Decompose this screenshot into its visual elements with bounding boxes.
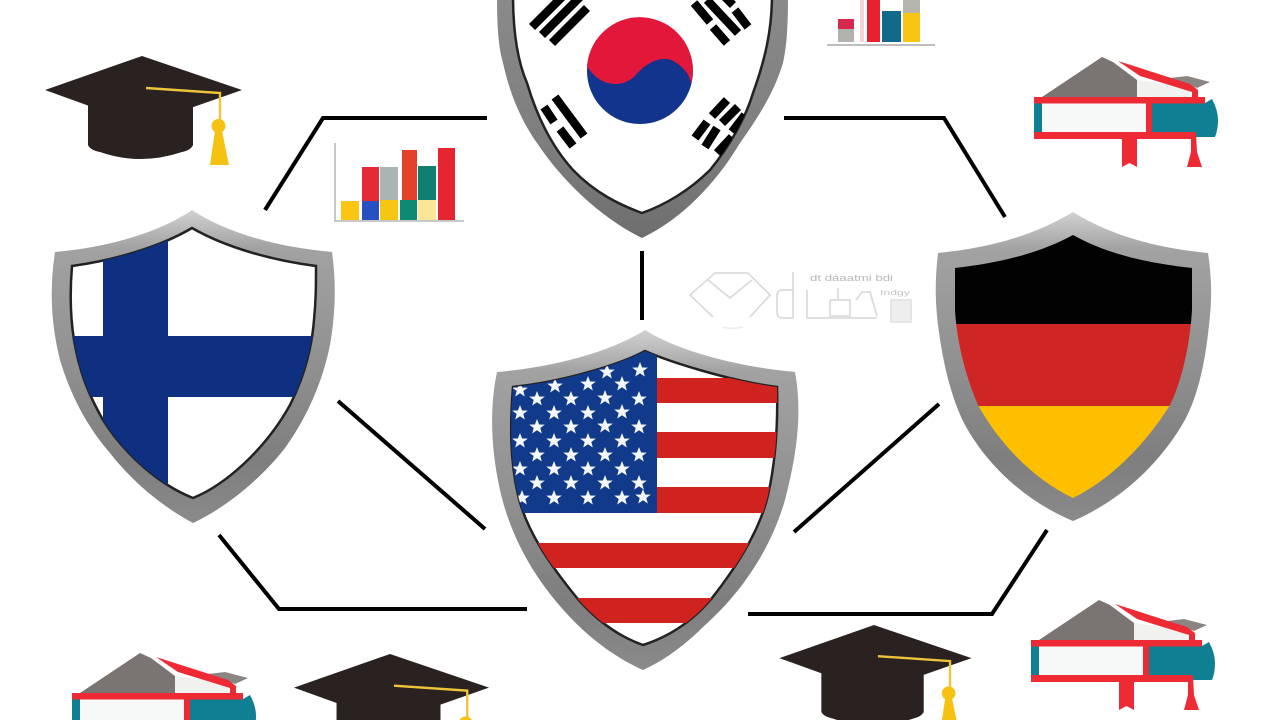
connector lines bbox=[219, 118, 1047, 614]
logo watermark bbox=[690, 272, 911, 328]
flag: Finland cross bbox=[73, 240, 312, 485]
taegeuk circle bbox=[587, 17, 693, 124]
icon: book and cap bottom right bbox=[1031, 600, 1215, 710]
icon: book and cap top right bbox=[1034, 57, 1218, 167]
connector: Finland to USA bbox=[338, 401, 485, 529]
icon: graduation cap top left bbox=[45, 56, 242, 165]
icon: graduation cap bottom centre-left bbox=[294, 654, 489, 720]
connector: Finland to USA lower bbox=[219, 535, 527, 609]
blue canton bbox=[505, 345, 657, 513]
connector: Germany to USA lower bbox=[748, 530, 1047, 614]
bar chart: top bbox=[827, 0, 935, 45]
flag: South Korea bbox=[532, 0, 748, 153]
connector: Finland to Korea bbox=[265, 118, 487, 210]
shield: South Korea bbox=[497, 0, 788, 238]
watermark small text: Indgy bbox=[880, 290, 911, 297]
flag: Germany stripes bbox=[955, 235, 1192, 498]
bar chart: left bbox=[335, 143, 464, 221]
icon: book and cap bottom left bbox=[72, 653, 256, 720]
trigrams bbox=[532, 0, 748, 153]
connector: Germany to USA bbox=[794, 404, 939, 532]
shield: USA bbox=[492, 330, 798, 670]
connector: Korea to USA bbox=[640, 251, 644, 320]
icon: graduation cap bottom centre-right bbox=[779, 625, 972, 720]
stars bbox=[512, 362, 651, 504]
watermark text: dt dáaatmi bdi bbox=[810, 273, 893, 284]
red stripes bbox=[538, 378, 778, 623]
shield: Germany bbox=[936, 212, 1211, 521]
connector: Korea to Germany bbox=[784, 118, 1005, 217]
shield: Finland bbox=[52, 210, 335, 523]
flag: USA stripes and stars bbox=[505, 345, 785, 623]
